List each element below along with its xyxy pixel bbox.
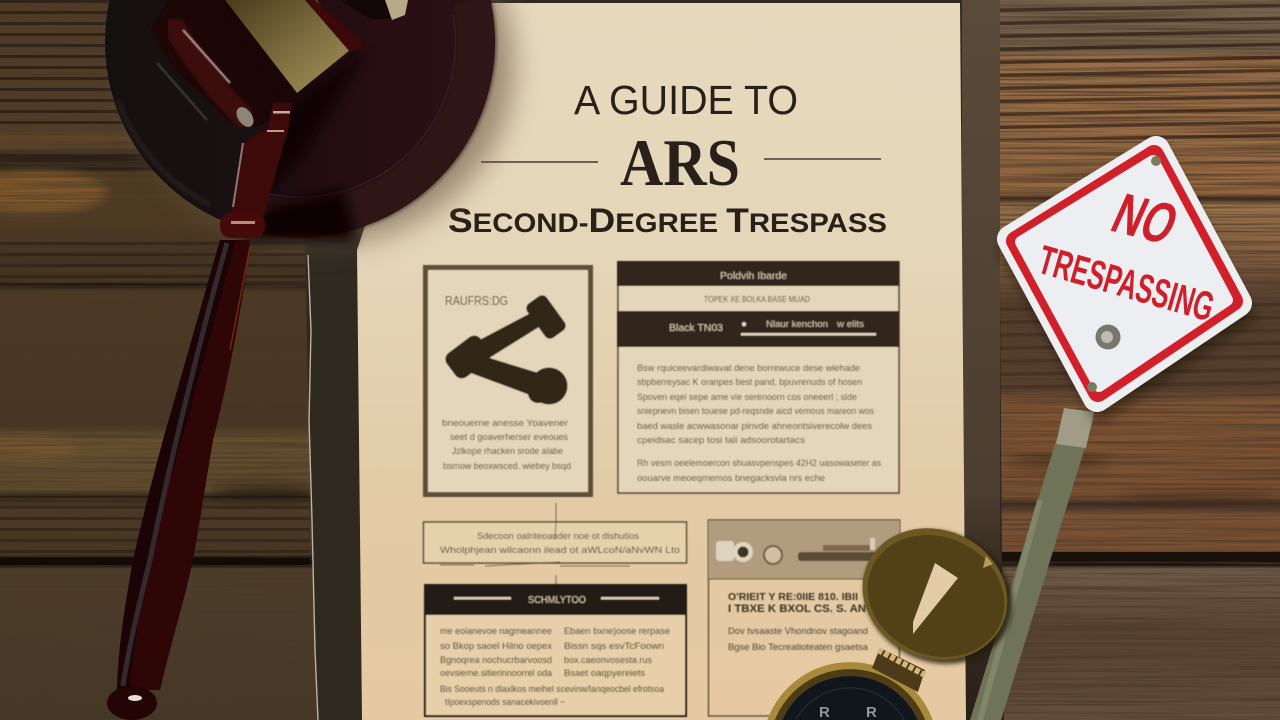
- panel: definition table: [617, 261, 899, 493]
- summary text: me eoianevoe nagmeannee: [440, 626, 552, 637]
- panel caption: seet d goaverherser eveoues: [450, 432, 568, 443]
- icons in strip: [716, 538, 883, 564]
- table body text: Bsw rquiceevardiwavat dene borrewuce dese wiehade: [637, 363, 860, 374]
- table body text: Rh vesm oeelemoercon shuasvpenspes 42H2 uasowaseter as: [637, 458, 881, 469]
- summary text: tIpoexspenods sanacekivoenll ~: [445, 697, 565, 708]
- table body text: Spoven eqei sepe ame vie serenoorn cos oneeerl ; slde: [637, 392, 857, 403]
- notice scratched line: Wholphjean wilcaonn ilead ot aWLcoN/aNvWN Lto: [440, 545, 680, 556]
- table body text: [637, 363, 881, 484]
- header rule left: [454, 597, 511, 600]
- panel caption: bneouerne anesse Yoavener: [442, 418, 568, 429]
- table body text: baed wasle acwwasonar pinvde ahneontsiverecolw dees: [637, 421, 872, 432]
- panel: summary: [424, 584, 687, 716]
- summary text: oevsieme.sitierinnoorrel oda: [440, 668, 553, 679]
- sound block: [105, 0, 495, 240]
- post collar: [1056, 408, 1094, 448]
- dark row labels: ●: [741, 319, 747, 330]
- gavel handle knob: [107, 686, 157, 720]
- table subheader label: TOPEK XE BOLKA BASE MUAD: [704, 294, 810, 304]
- sign bolt: [1096, 324, 1120, 350]
- table header label: Poldvih Ibarde: [720, 271, 787, 282]
- dark row labels: [669, 319, 876, 336]
- panel line two: Bgse Bio Tecreatioteaten gsaetsa: [728, 642, 869, 653]
- sign screw bottom: [1087, 382, 1097, 392]
- panel sub heading: I TBXE K BXOL CS. S. ANT: [728, 603, 873, 615]
- compass body: [767, 662, 933, 720]
- panel caption: Jzlkope rhacken srode alabe: [452, 446, 563, 457]
- dark row labels: Nlaur kenchon: [766, 319, 828, 329]
- summary text: so Bkop saoel Hilno oepex: [440, 641, 552, 652]
- summary text: box.caeonvosesta.rus: [564, 655, 652, 666]
- panel heading: O'RIEIT Y RE:0IIE 810. IBII: [728, 591, 858, 603]
- sign screw top: [1151, 156, 1161, 166]
- title rule left: [481, 161, 598, 163]
- sign plate: [1011, 150, 1238, 398]
- heading: a guide to: A GUIDE TO: [574, 77, 798, 123]
- summary header: [424, 584, 687, 615]
- sign text: no: NO: [1103, 182, 1188, 256]
- table body text: sniepnevn bisen touese pd-reqsnde aicd vemous mareon wos: [637, 406, 874, 417]
- gavel head: [150, 0, 408, 130]
- panel image strip: [708, 520, 900, 579]
- lid catch: [983, 556, 993, 568]
- heading: ARS: ARS: [620, 126, 740, 200]
- header rule right: [601, 597, 659, 600]
- no trespassing sign: [1011, 150, 1238, 398]
- notice text: Sdecoon oalnteoander noe ot dishutios: [477, 531, 639, 542]
- document backing board: [305, 0, 1004, 720]
- sign post: [970, 408, 1094, 720]
- lid window: [913, 563, 958, 634]
- gavel sound block shadow: [126, 0, 514, 245]
- table header: [617, 261, 899, 286]
- dark row labels: Black TN03: [669, 323, 723, 334]
- summary text: Bis Sooeuts n dlaxlkos meihel scevinw/lanqeocbel efrotsoa: [440, 684, 665, 695]
- panel: dumbbell figure: [426, 268, 590, 494]
- compass: [767, 505, 1034, 720]
- title rule right: [764, 158, 881, 160]
- panel: torn notice box: [424, 503, 686, 585]
- sign inner field: [1021, 161, 1227, 386]
- paper sheet: [357, 3, 966, 720]
- sign red border: [1016, 155, 1233, 392]
- summary text: Bgnoqrea nochucrbarvoosd: [440, 655, 552, 666]
- compass lid: [841, 505, 1034, 687]
- summary heading: SCHMLYTOO: [528, 594, 586, 606]
- title: [448, 77, 887, 240]
- subtitle: second-degree trespass: SECOND- DEGREE TRESPASS: [448, 202, 887, 240]
- panel caption: bsrnow beoxwsced. wiebey bsqd: [443, 461, 571, 472]
- gavel handle: [117, 240, 250, 690]
- panel: equipment box: [708, 520, 900, 716]
- compass hinge: [872, 648, 925, 692]
- panel label: RAUFRS:DG: [445, 293, 508, 308]
- gavel: [105, 0, 495, 720]
- table body text: cpeidsac sacep tosi tali adsoorotartacs: [637, 435, 805, 446]
- summary text: Ebaen bxne)oose rerpase: [564, 626, 670, 637]
- gavel neck: [220, 103, 292, 238]
- table body text: oouarve meoeqmemos bnegacksvla nrs eche: [637, 473, 825, 484]
- table body text: sbpberreysac K oranpes best pand, bpuvrenuds of hosen: [637, 377, 862, 388]
- table dark row: [617, 311, 899, 347]
- sign shadow: [998, 140, 1255, 424]
- paper crack: [440, 503, 630, 585]
- summary text: Bissn sqs esvTcFoown: [564, 641, 664, 652]
- summary text: [440, 626, 670, 708]
- panel line one: Dov tvsaaste Vhondnov stagoand: [728, 626, 868, 637]
- icon: hammer-like tool: [442, 293, 568, 404]
- dark row labels: w elits: [836, 319, 865, 329]
- panel caption: [442, 418, 571, 472]
- summary text: Bsaet oaqpyereiets: [564, 668, 645, 679]
